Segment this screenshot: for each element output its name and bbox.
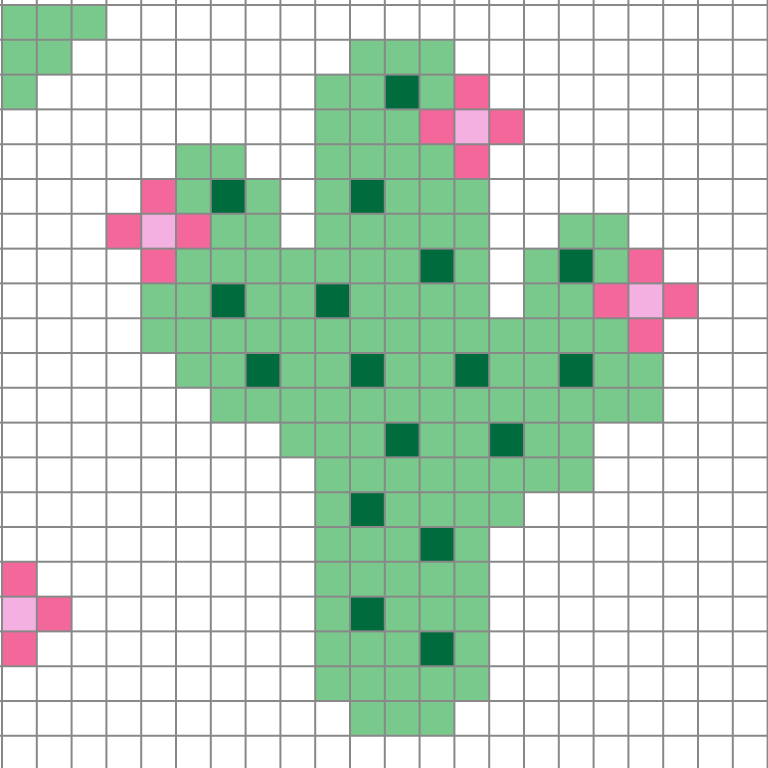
flower top — [420, 75, 524, 179]
corner leaf top-left — [2, 5, 106, 109]
cactus body — [141, 40, 663, 736]
flower right — [594, 249, 698, 353]
flower bottom-left — [2, 562, 72, 666]
cactus spines (dark dots) — [211, 75, 594, 666]
flower left — [106, 179, 211, 283]
